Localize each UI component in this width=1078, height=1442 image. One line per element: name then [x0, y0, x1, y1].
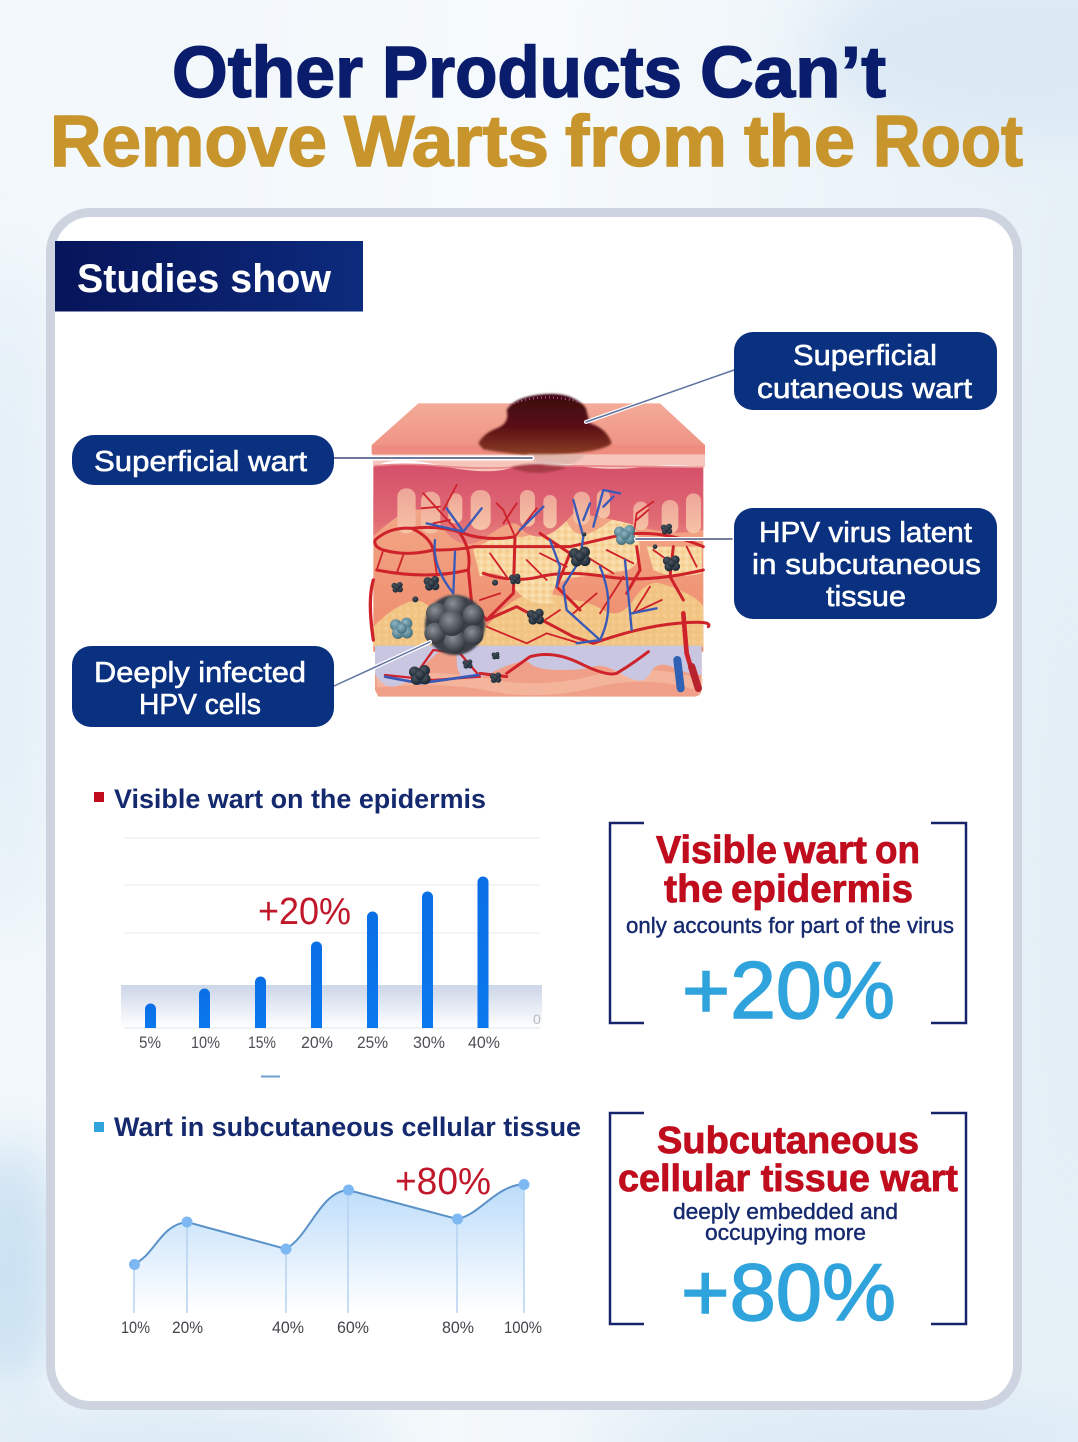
leader line: HPV latent	[636, 537, 732, 541]
wart	[478, 394, 612, 455]
bar chart: 25%	[357, 1034, 388, 1052]
area line chart: +80%	[395, 1161, 491, 1203]
title: from	[565, 102, 727, 182]
area line chart: 80%	[442, 1319, 474, 1337]
leader line: superficial cutaneous wart	[586, 370, 734, 422]
skin cross-section illustration	[370, 394, 709, 697]
bracket box: visible wart: on	[875, 829, 920, 872]
bracket box: visible wart: epidermis	[731, 868, 913, 911]
callout: superficial wart	[72, 435, 334, 485]
callout: deeply infected HPV cells: Deeply infected	[94, 657, 306, 689]
area line chart: 60%	[337, 1319, 369, 1337]
bar chart: 5%	[139, 1034, 161, 1052]
callout: deeply infected HPV cells	[72, 646, 334, 727]
virus clusters	[391, 524, 680, 685]
bracket box: visible wart: only accounts for part of the virus	[626, 913, 954, 938]
leader line: superficial wart	[334, 456, 532, 460]
epidermis front	[372, 445, 705, 471]
blue veins	[385, 490, 657, 683]
bracket box: visible wart: wart	[783, 829, 867, 872]
bar chart: 20%	[301, 1034, 333, 1052]
bar chart: 30%	[413, 1034, 445, 1052]
area line chart: 100%	[504, 1319, 542, 1337]
heading: visible wart on the epidermis: Visible wart on the epidermis	[114, 784, 486, 814]
bracket box: visible wart: the	[664, 868, 723, 911]
bracket box: subcutaneous wart: cellular tissue wart	[618, 1158, 958, 1200]
title: Remove	[50, 102, 327, 182]
callout: superficial wart: Superficial wart	[94, 446, 307, 478]
vessel tubes	[677, 660, 681, 688]
bracket box: subcutaneous wart: Subcutaneous	[657, 1120, 919, 1162]
bar chart: 10%	[191, 1034, 220, 1052]
callout: HPV virus latent: in subcutaneous	[752, 549, 981, 581]
bracket box: visible wart: +20%	[682, 946, 895, 1036]
heading tag: Studies show: Studies show	[77, 257, 332, 301]
title: Can’t	[700, 33, 886, 113]
red vessels	[370, 527, 709, 687]
callout: HPV virus latent: tissue	[826, 581, 906, 613]
callout: HPV virus latent: HPV virus latent	[759, 517, 972, 549]
lilac band	[375, 646, 702, 687]
leader line: deeply infected	[334, 642, 430, 686]
callout: HPV virus latent	[734, 508, 997, 619]
bar chart: +20%	[258, 891, 351, 933]
bar chart: 0	[533, 1011, 541, 1027]
bottom layer	[375, 647, 702, 697]
papillae	[397, 488, 701, 533]
title: Root	[873, 102, 1023, 182]
bracket box: subcutaneous wart: occupying more	[705, 1220, 866, 1245]
title: Warts	[344, 102, 549, 182]
heading tag: Studies show	[55, 241, 363, 312]
area line chart	[121, 1161, 542, 1337]
callout: deeply infected HPV cells: HPV cells	[139, 689, 261, 721]
panel: main card	[50, 212, 1018, 1406]
callout: superficial cutaneous wart: cutaneous wart	[757, 373, 972, 405]
bracket box: subcutaneous wart	[610, 1113, 966, 1338]
area line chart: 10%	[121, 1319, 150, 1337]
bracket box: visible wart	[610, 823, 966, 1036]
bracket box: subcutaneous wart: +80%	[681, 1248, 896, 1338]
top face	[372, 403, 705, 445]
title: the	[744, 102, 855, 182]
heading: wart in subcutaneous tissue: Wart in subcutaneous cellular tissue	[114, 1112, 581, 1142]
bar chart: 40%	[468, 1034, 500, 1052]
yellow fat lobes	[373, 583, 703, 647]
area line chart: 20%	[172, 1319, 203, 1337]
bracket box: visible wart: Visible	[656, 829, 777, 872]
callout: superficial cutaneous wart: Superficial	[793, 340, 937, 372]
bar chart	[121, 838, 542, 1078]
area line chart: 40%	[272, 1319, 304, 1337]
title: Other	[172, 33, 363, 113]
large cluster	[424, 595, 485, 655]
dermis	[373, 464, 703, 544]
peach layer	[373, 497, 703, 652]
callout: superficial cutaneous wart	[734, 332, 997, 410]
title	[50, 33, 1023, 182]
title: Products	[382, 33, 682, 113]
bracket box: subcutaneous wart: deeply embedded and	[673, 1199, 898, 1224]
bar chart: 15%	[248, 1034, 276, 1052]
